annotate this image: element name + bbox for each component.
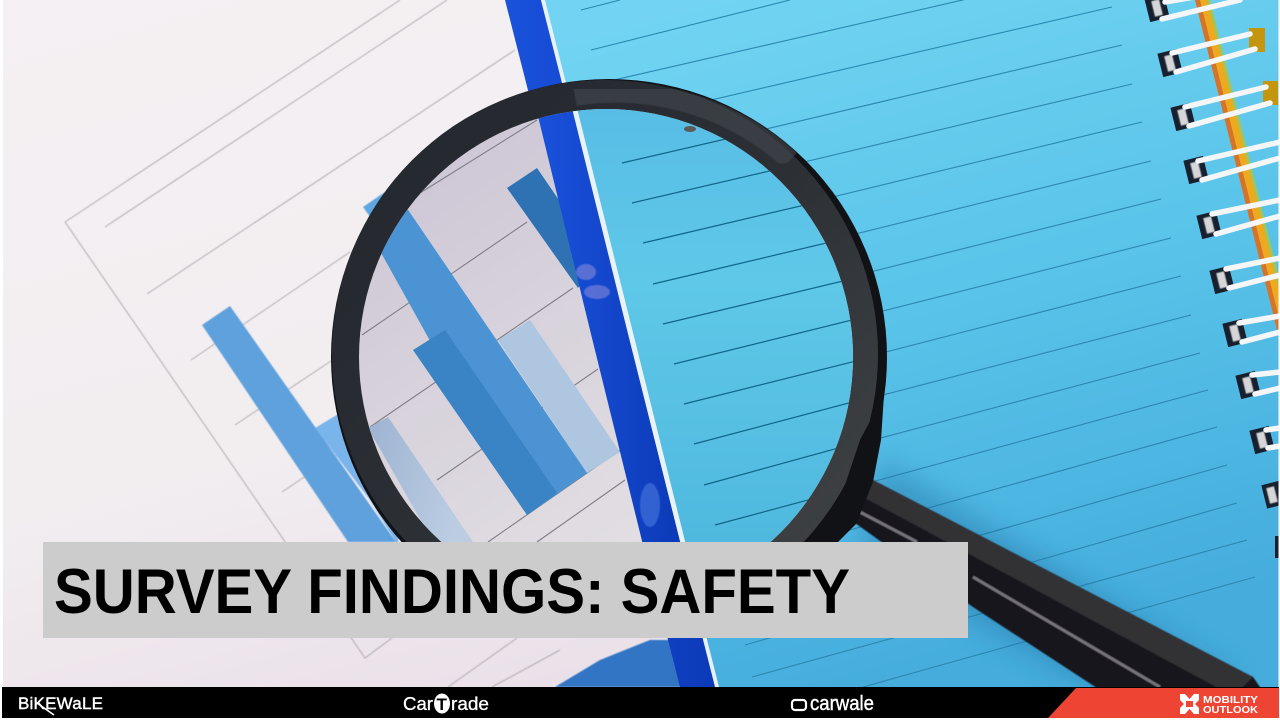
- logo: carwale: carwale: [810, 693, 874, 715]
- notebook white edge: [541, 0, 720, 687]
- ring ferrule joining handle: [816, 398, 884, 542]
- mobility outlook icon: [1180, 694, 1199, 714]
- magnifier ring: [331, 79, 887, 542]
- title text: SURVEY FINDINGS: SAFETY: [54, 557, 850, 627]
- magnifier shadow on notebook: [856, 462, 1200, 687]
- lens speck: [684, 126, 696, 132]
- logo: BikeWale: BiKEWaLE: [18, 694, 103, 713]
- ring far ends: [1249, 28, 1278, 105]
- magnifier handle: [830, 480, 1262, 690]
- lens glare on binding: [576, 264, 660, 527]
- logo: Mobility Outlook: [1180, 694, 1258, 716]
- title banner: [43, 542, 968, 638]
- logo: CarTrade: rade: [451, 694, 489, 714]
- notebook ruled lines: [581, 0, 1255, 687]
- logo: CarTrade: T: [436, 695, 448, 714]
- lens view: [359, 109, 853, 542]
- lens notebook white edge: [572, 108, 686, 545]
- logo: CarTrade: [403, 694, 489, 714]
- ring highlight: [575, 93, 790, 160]
- lens chart grid lines: [362, 120, 625, 542]
- orange notebook stripe: [1195, 0, 1280, 330]
- logo: Mobility Outlook: MOBILITY: [1203, 694, 1258, 706]
- lens ruled lines: [622, 108, 860, 525]
- cyan notebook: [545, 0, 1280, 687]
- lens paper: [359, 109, 853, 542]
- logo: CarTrade: Car: [403, 694, 433, 714]
- lens bars: [498, 320, 620, 473]
- ring hole inserts: [1151, 0, 1278, 504]
- spiral binding rings: [1144, 0, 1280, 558]
- image right edge: [1278, 0, 1280, 687]
- footer red corner: [1048, 688, 1279, 718]
- lens notebook: [577, 108, 880, 545]
- logo: Mobility Outlook: OUTLOOK: [1203, 704, 1258, 716]
- white chart paper: [3, 0, 680, 687]
- footer bar: [2, 687, 1279, 718]
- lens notebook binding: [536, 108, 681, 545]
- printed bar chart on paper: [65, 0, 682, 687]
- blue notebook binding: [505, 0, 716, 687]
